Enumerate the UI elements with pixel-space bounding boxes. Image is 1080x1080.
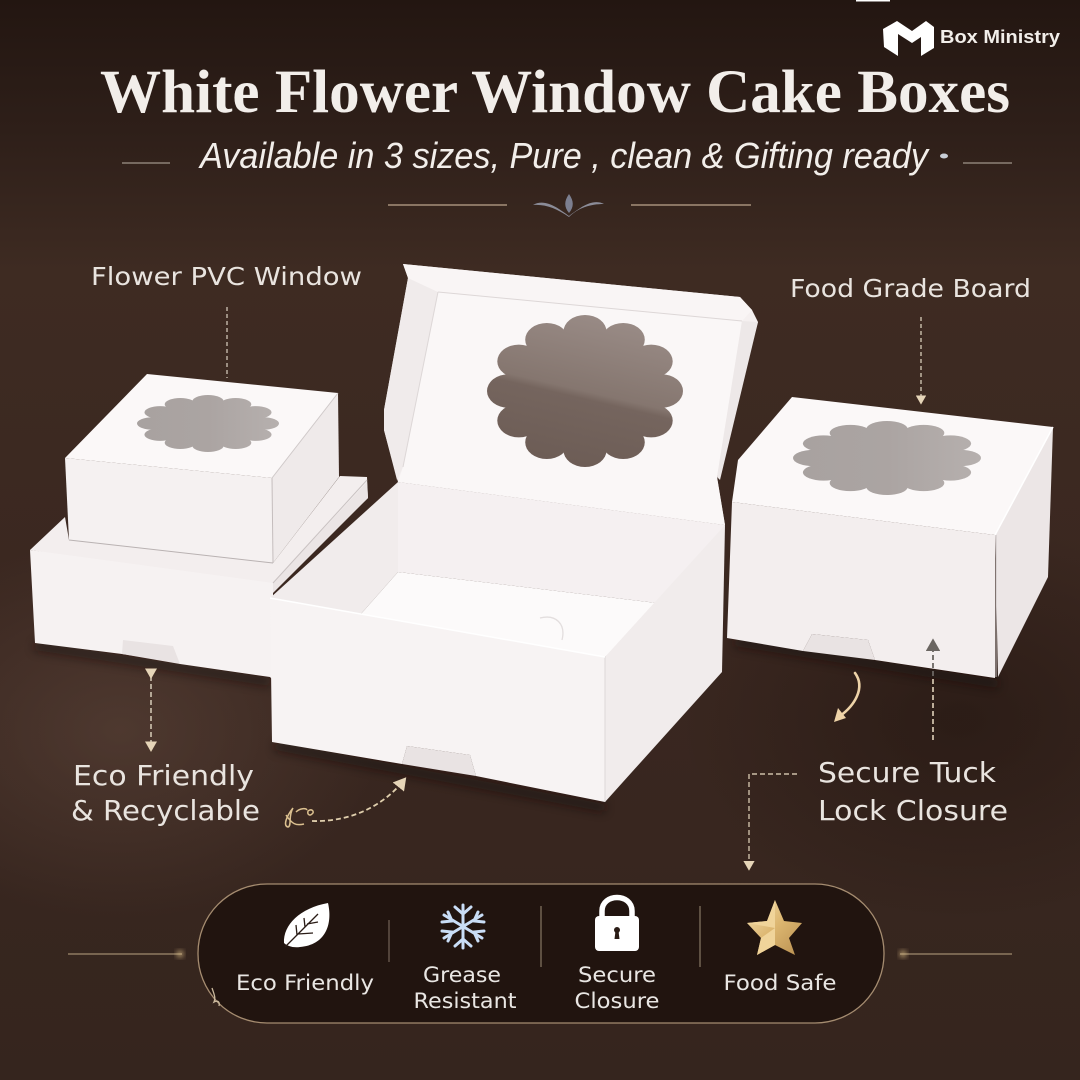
- flower window: small box: [137, 395, 279, 452]
- callout: Food Grade Board: Food Grade Board: [790, 274, 1031, 303]
- box: lower left large: [30, 476, 368, 680]
- box: small top: [65, 374, 339, 563]
- flower window: right box: [793, 421, 981, 495]
- callout: Secure Tuck Lock Closure: Lock Closure: [818, 794, 1008, 827]
- label: Eco Friendly: Eco Friendly: [236, 971, 374, 995]
- label: Grease Resistant: Grease: [423, 963, 501, 987]
- label: Grease Resistant: Resistant: [414, 989, 516, 1013]
- icon: leaf: [284, 903, 329, 947]
- arrow: curved to centre box: [286, 780, 404, 827]
- icon: padlock: [595, 898, 639, 951]
- lid: [384, 264, 758, 525]
- subtitle: Available in 3 sizes, Pure , clean & Gifting ready: [198, 135, 930, 176]
- callout: Secure Tuck Lock Closure: Secure Tuck: [818, 756, 997, 789]
- panel: feature badges: [198, 884, 884, 1023]
- label: Secure Closure: [574, 963, 660, 1013]
- logo: Box Ministry: [883, 21, 1060, 56]
- label: Food Safe: Food Safe: [724, 971, 836, 995]
- boxes: stacked left: [30, 374, 368, 682]
- side glow lines: [68, 951, 1012, 957]
- icon: star: [747, 900, 802, 955]
- callout: Secure Tuck Lock Closure: [749, 642, 1008, 868]
- icon: snowflake: [442, 905, 484, 948]
- label: Secure Closure: Secure: [578, 963, 656, 987]
- flower window: lid: [487, 315, 683, 467]
- ornamental divider: [388, 194, 751, 217]
- title: White Flower Window Cake Boxes: [100, 59, 1010, 126]
- callout: Eco Friendly & Recyclable: [71, 676, 260, 827]
- callout: Eco Friendly & Recyclable: Eco Friendly: [73, 759, 254, 792]
- callout: Eco Friendly & Recyclable: & Recyclable: [71, 794, 260, 827]
- callout: Flower PVC Window: Flower PVC Window: [91, 262, 362, 291]
- box: right: [727, 397, 1053, 684]
- arrow: curved to right box: [834, 673, 859, 722]
- label: Grease Resistant: [414, 963, 516, 1013]
- box: centre open: [270, 264, 758, 808]
- logo: Box Ministry: Box Ministry: [940, 27, 1060, 47]
- label: Secure Closure: Closure: [574, 989, 660, 1013]
